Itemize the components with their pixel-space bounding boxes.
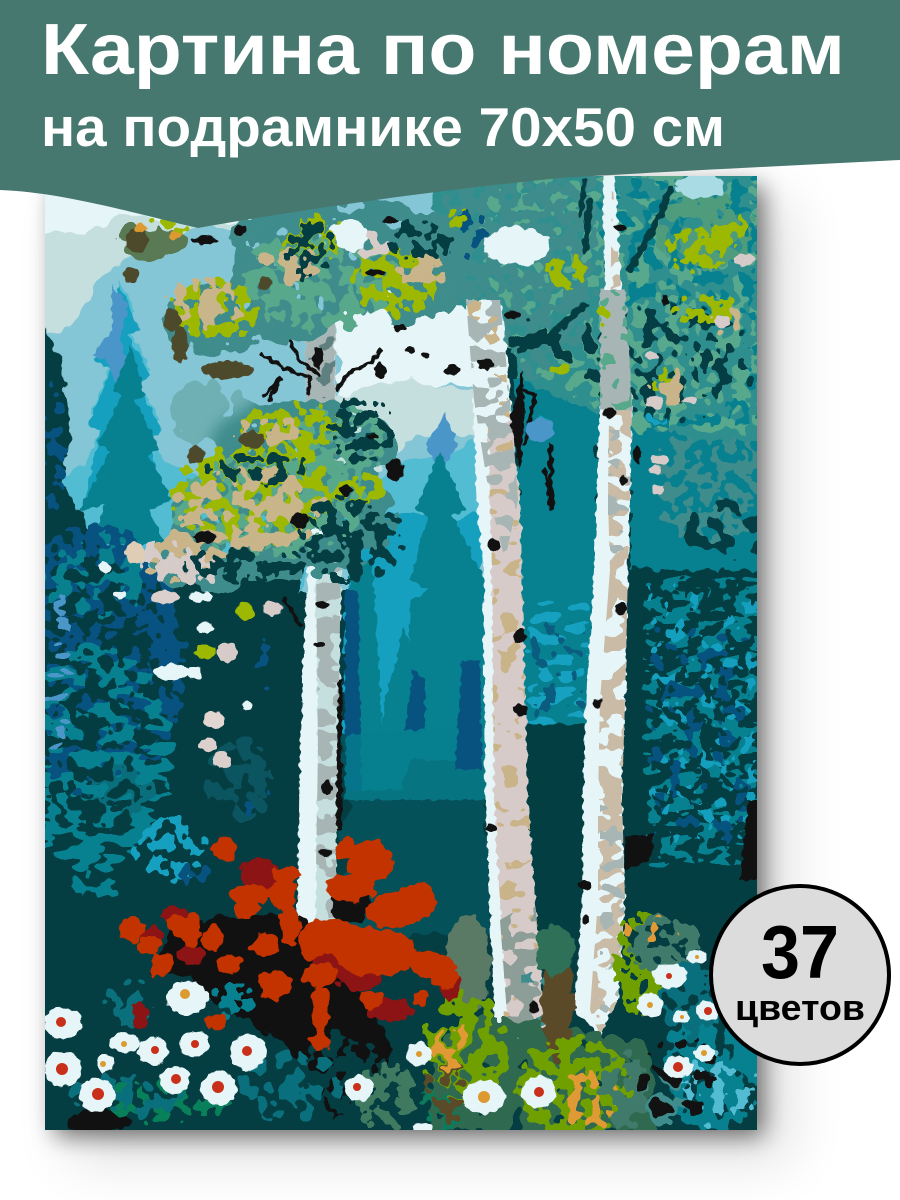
colour count badge: 37	[761, 910, 839, 994]
birch tree: middle	[466, 300, 548, 1055]
middle forest wall between trees	[511, 378, 600, 726]
branches	[262, 180, 670, 625]
right forest wall	[624, 426, 757, 882]
hanging pale leaves	[99, 542, 282, 768]
title: Картина по номерам	[41, 10, 845, 90]
left forest wall	[45, 327, 304, 898]
fir silhouettes	[70, 280, 490, 800]
red flower bush	[120, 836, 462, 1050]
foliage base: right crown	[430, 170, 770, 440]
canvas drop shadow	[55, 186, 790, 1160]
birch tree: left	[297, 320, 342, 935]
colour count badge: цветов	[735, 987, 865, 1028]
white daisies	[44, 950, 720, 1134]
foreground patches	[60, 905, 770, 1140]
header banner	[0, 0, 900, 228]
sky and misty background bands	[20, 170, 500, 935]
birch tree: right	[574, 176, 640, 1035]
subtitle: на подрамнике 70х50 см	[41, 96, 725, 158]
foliage: upper left crown	[110, 198, 475, 594]
colour count badge	[711, 886, 889, 1064]
foliage: upper right crown accents	[435, 204, 756, 497]
light gaps through foliage	[484, 174, 724, 265]
black shadow under the bush	[68, 887, 395, 1134]
painting canvas: birch forest	[45, 176, 757, 1130]
